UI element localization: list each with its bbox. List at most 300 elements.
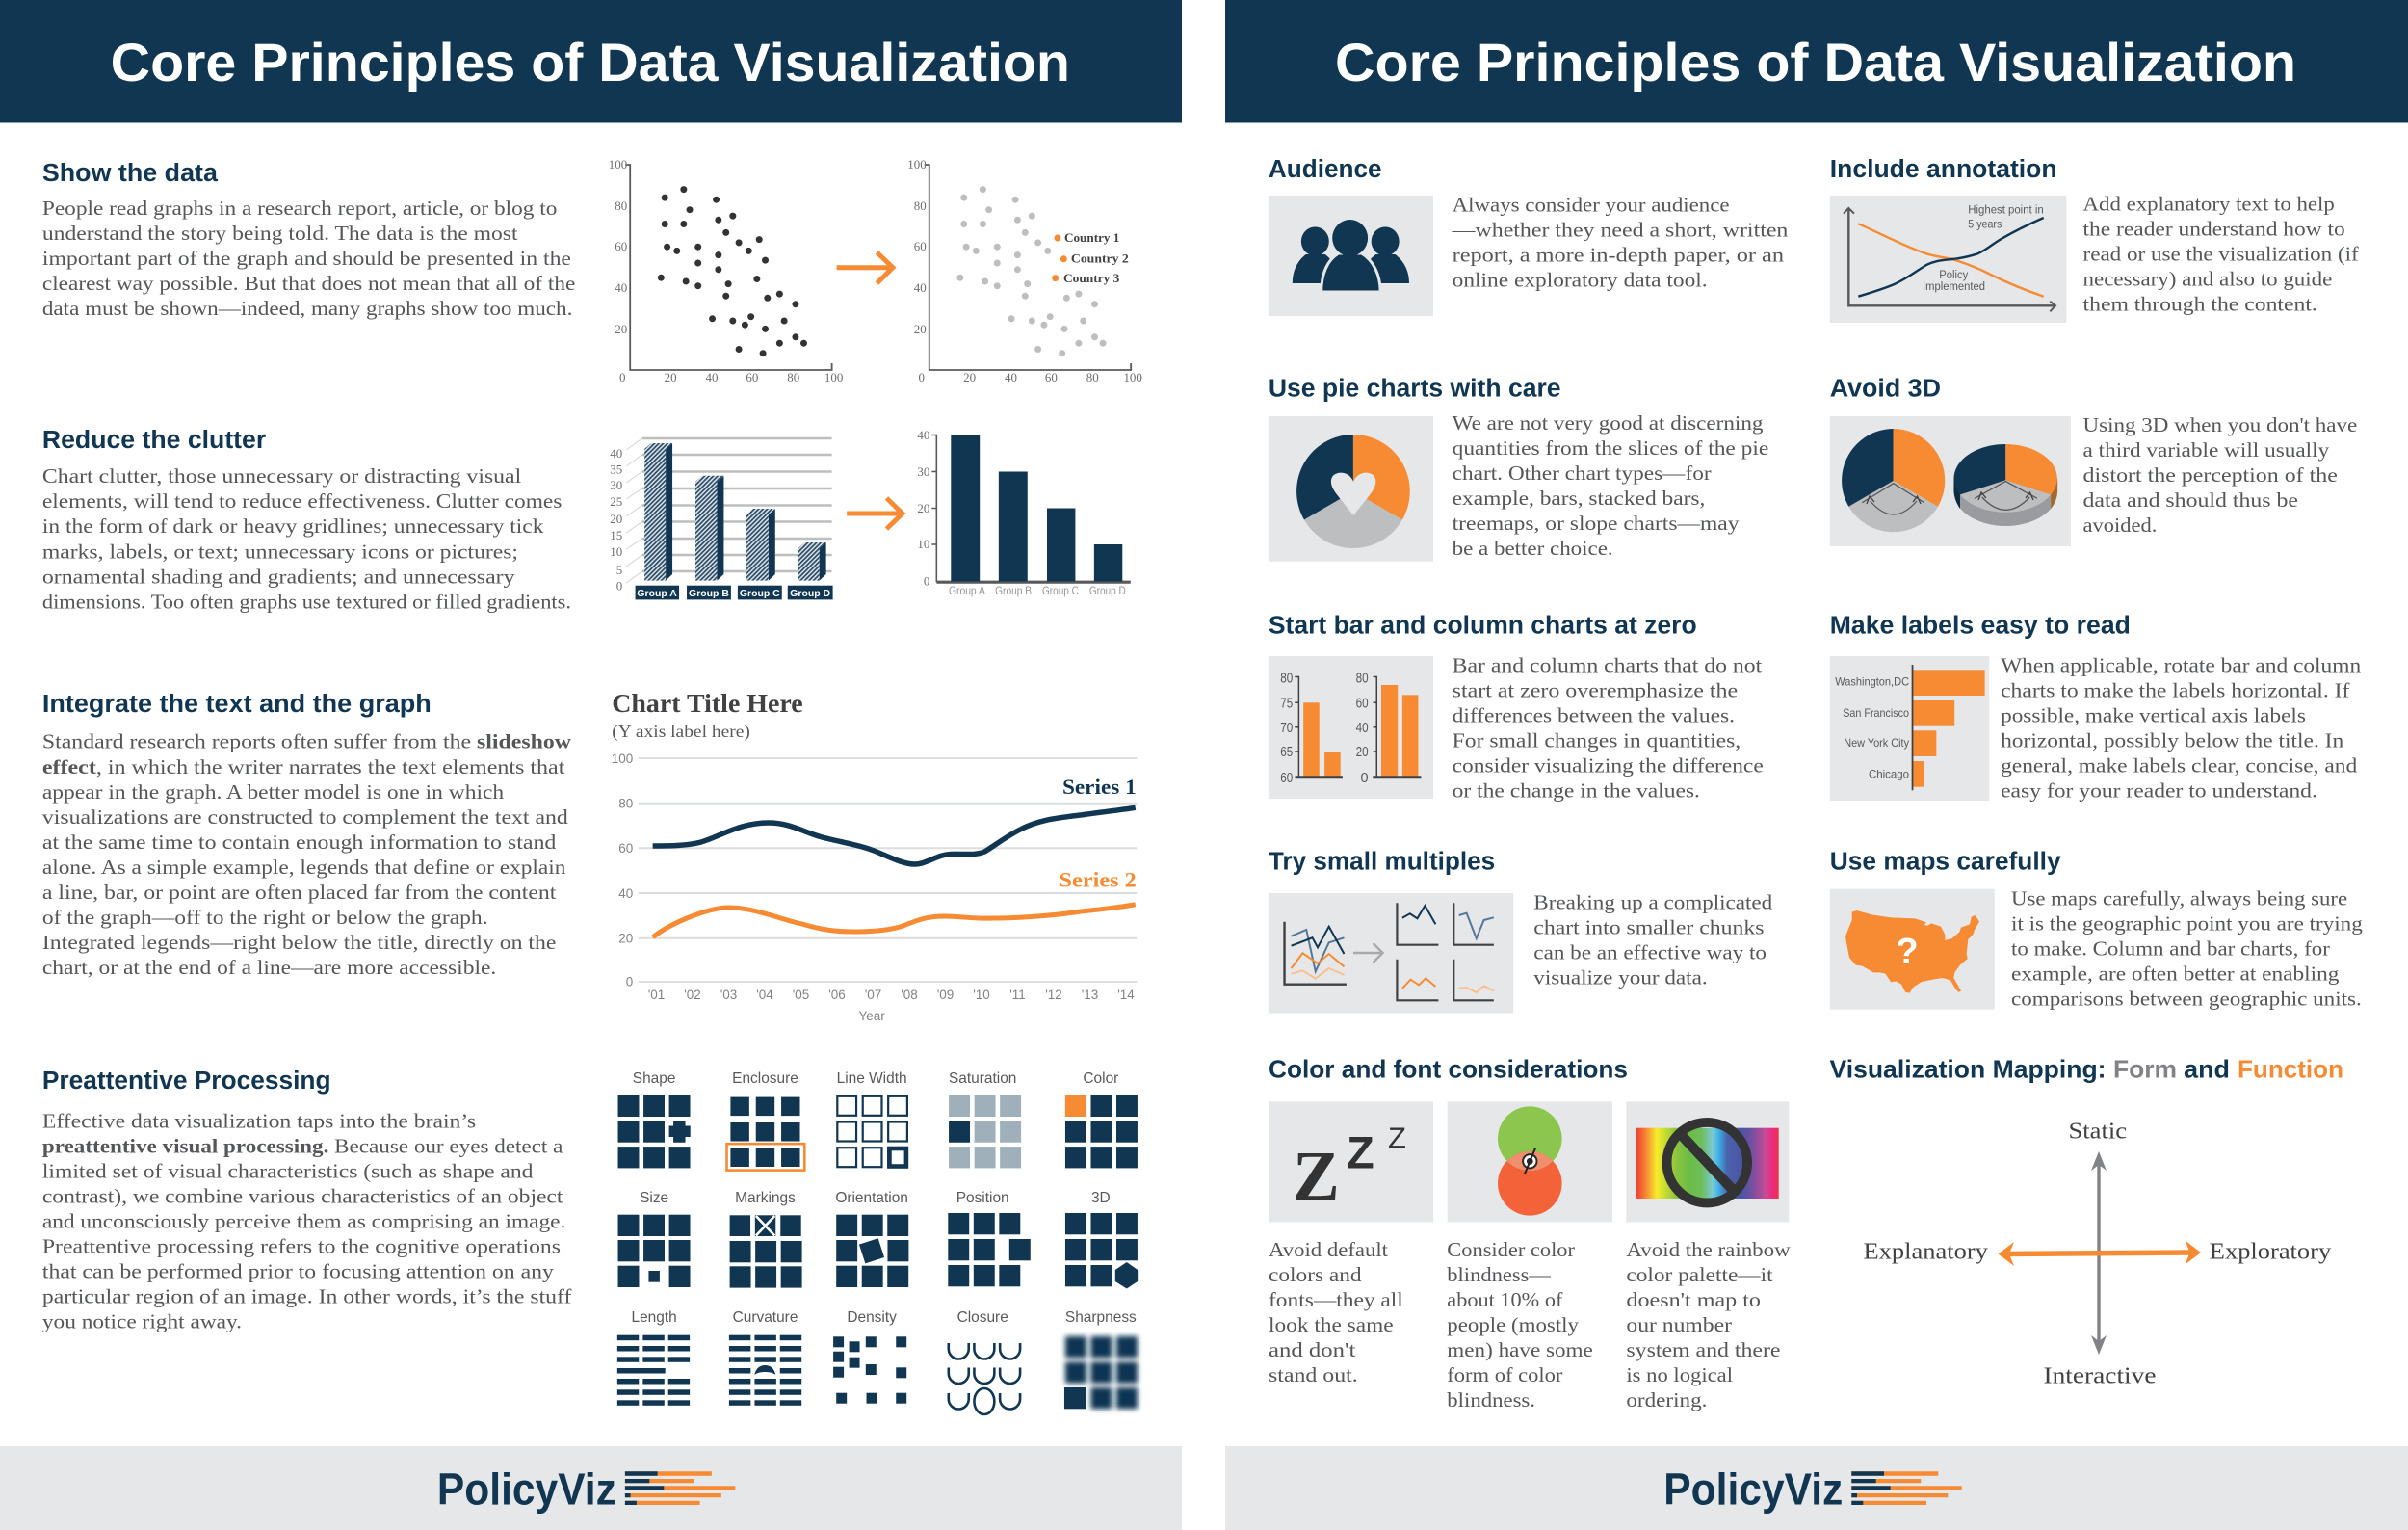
panel: Reduce the clutter <box>42 425 1131 614</box>
panel: Use pie charts with care <box>1269 374 1768 562</box>
panel: Color and font considerations <box>1269 1054 1791 1411</box>
text block <box>2083 192 2360 315</box>
text block: contrast), we combine various characteristics of an object <box>42 1185 563 1208</box>
text block: rainbow: is no logical <box>1626 1363 1733 1386</box>
y axis label: (Y axis label here) <box>612 722 750 742</box>
icon grid: 3D: 3D <box>1091 1190 1111 1206</box>
chart: line chart: '06 <box>828 988 846 1002</box>
text block: read or use the visualization (if <box>2083 242 2360 265</box>
text block: rainbow: color palette—it <box>1626 1263 1773 1286</box>
text block: to make. Column and bar charts, for <box>2011 936 2330 960</box>
icon grid: Markings <box>730 1190 802 1288</box>
panel: Include annotation <box>1830 154 2360 323</box>
heading: Show the data <box>42 158 218 187</box>
heading: Visualization Mapping: <box>1830 1054 2106 1083</box>
icon grid: Density: Density <box>847 1309 897 1326</box>
chart: cluttered 3D bars <box>610 438 833 599</box>
image box <box>1269 196 1433 316</box>
heading: Reduce the clutter <box>42 425 266 454</box>
chart: clean bars: 20 <box>917 501 929 515</box>
chart: annotated lines: Implemented <box>1923 281 1985 293</box>
image box <box>1830 656 1989 801</box>
heading: Make labels easy to read <box>1830 610 2131 640</box>
text block <box>2011 886 2363 1010</box>
chart: clean bars: Group B <box>995 586 1032 597</box>
chart: flat pie <box>1842 429 1945 532</box>
chart: line chart: '08 <box>901 988 918 1002</box>
series 2 label: Series 2 <box>1060 868 1137 892</box>
chart: line chart: '14 <box>1117 988 1135 1002</box>
arrow <box>847 498 903 529</box>
heading: Function <box>2238 1054 2343 1083</box>
icon grid: 3D <box>1065 1190 1138 1289</box>
image box <box>1830 196 2066 323</box>
text block: fonts: and don't <box>1269 1338 1355 1361</box>
chart: line chart: '03 <box>720 988 737 1002</box>
chart: clean bars: Group A <box>949 586 985 597</box>
chart: line chart: 60 <box>618 841 633 856</box>
text block: color blindness: form of color <box>1447 1363 1562 1386</box>
chart: zero axis bars: 80 <box>1356 671 1369 687</box>
chart: scatter plot before: 60 <box>615 239 627 253</box>
text block: quantities from the slices of the pie <box>1453 436 1768 460</box>
chart: clean bars: 10 <box>917 537 929 551</box>
text block: Add explanatory text to help <box>2083 192 2335 215</box>
icon grid: Curvature: Curvature <box>733 1309 798 1326</box>
series 1 label: Series 1 <box>1062 775 1137 799</box>
text block: it is the geographic point you are trying <box>2011 911 2363 935</box>
text block: them through the content. <box>2083 292 2317 315</box>
axis label: static: Static <box>2069 1119 2127 1144</box>
text block: treemaps, or slope charts—may <box>1453 512 1740 535</box>
chart: line chart: '10 <box>973 988 990 1002</box>
chart: cluttered 3D bars: Group D <box>790 589 831 599</box>
icon grid: Saturation <box>949 1070 1021 1168</box>
text block: fonts: fonts—they all <box>1269 1288 1403 1311</box>
chart: cluttered 3D bars: 40 <box>610 446 622 461</box>
icon grid: Length <box>617 1309 690 1406</box>
chart: cluttered 3D bars: Group C <box>740 589 780 599</box>
heading: Avoid 3D <box>1830 374 1941 403</box>
text block <box>42 464 571 614</box>
text block: consider visualizing the difference <box>1453 753 1764 777</box>
text block: charts to make the labels horizontal. If <box>2001 678 2350 701</box>
icon grid: Length: Length <box>631 1309 677 1326</box>
logo: left footer: PolicyViz <box>437 1464 616 1515</box>
chart: line chart: '13 <box>1082 988 1098 1002</box>
axis label: exploratory: Exploratory <box>2210 1240 2331 1265</box>
panel: Start bar and column charts at zero <box>1269 610 1764 802</box>
chart: horizontal bars with labels: Chicago <box>1869 769 1909 780</box>
icon grid: Line Width <box>837 1070 907 1167</box>
text block: appear in the graph. A better model is one in which <box>42 780 504 804</box>
icon grid: Size <box>618 1190 691 1287</box>
text block: horizontal, possibly below the title. In <box>2001 728 2343 752</box>
icon grid: Orientation: Orientation <box>835 1190 908 1206</box>
icon grid: Color <box>1065 1070 1138 1168</box>
text block: and unconsciously perceive them as comprising an image. <box>42 1210 565 1233</box>
chart: small multiple light orange <box>1453 960 1494 1000</box>
text block: clearest way possible. But that does not mean that all of the <box>42 272 575 295</box>
chart: annotated lines: Highest point in <box>1968 205 2044 217</box>
text block: chart into smaller chunks <box>1533 915 1764 938</box>
chart: annotated lines: 5 years <box>1968 220 2002 231</box>
chart: small multiple blue <box>1453 903 1494 945</box>
text block: general, make labels clear, concise, and <box>2001 753 2358 777</box>
text block: online exploratory data tool. <box>1453 268 1708 291</box>
panel: Avoid 3D <box>1830 374 2357 546</box>
text block: Effective data visualization taps into the brain’s <box>42 1110 476 1133</box>
panel: Visualization Mapping <box>1830 1054 2343 1388</box>
left page background bands <box>0 0 1182 1530</box>
text block <box>42 1110 572 1333</box>
text block: color blindness: about 10% of <box>1447 1288 1563 1311</box>
chart: horizontal bars with labels <box>1835 665 1985 790</box>
icon: Zzz letters <box>1293 1121 1406 1215</box>
text block <box>42 730 572 979</box>
chart: scatter plot before: 40 <box>705 370 718 384</box>
chart: horizontal bars with labels: San Francisco <box>1843 708 1909 720</box>
text block: can be an effective way to <box>1533 940 1767 963</box>
text block <box>1453 411 1768 560</box>
text block: fonts <box>1269 1238 1403 1386</box>
icon grid: Sharpness: Sharpness <box>1065 1309 1137 1326</box>
text block <box>1452 193 1789 291</box>
logo: right footer <box>1663 1464 1962 1515</box>
panel: Use maps carefully <box>1830 847 2363 1010</box>
chart: scatter plot after: 80 <box>914 198 927 213</box>
icon grid: Closure: Closure <box>957 1309 1008 1326</box>
chart: scatter plot before: 20 <box>615 322 627 336</box>
text block: rainbow: Avoid the rainbow <box>1626 1238 1791 1261</box>
text block: understand the story being told. The data is the most <box>42 222 518 245</box>
chart: line chart <box>612 689 1137 1023</box>
text block: report, a more in-depth paper, or an <box>1453 243 1784 266</box>
chart: cluttered 3D bars: 30 <box>610 478 622 492</box>
icon grid: Density <box>833 1309 906 1404</box>
chart: cluttered 3D bars: 15 <box>610 528 622 542</box>
chart: line chart: '02 <box>684 988 701 1002</box>
icon grid: Saturation: Saturation <box>949 1070 1016 1087</box>
text block: Standard research reports often suffer from the slideshow <box>42 730 572 753</box>
icon: prohibited rainbow <box>1636 1122 1779 1202</box>
text block: data must be shown—indeed, many graphs show too much. <box>42 297 572 320</box>
text block: Integrated legends—right below the title, directly on the <box>42 931 556 954</box>
chart: cluttered 3D bars: 0 <box>616 578 622 594</box>
text block: at the same time to contain enough information to stand <box>42 831 557 854</box>
text block: color blindness: people (mostly <box>1447 1313 1579 1336</box>
chart: scatter plot after: 20 <box>914 322 927 336</box>
text block: avoided. <box>2083 514 2157 537</box>
icon: Zzz letters: Z <box>1347 1126 1374 1177</box>
chart: annotated lines: Policy <box>1939 270 1969 281</box>
icon grid: Enclosure <box>727 1070 804 1171</box>
chart: scatter plot after: Country 1 <box>1064 230 1119 245</box>
text block: marks, labels, or text; unnecessary icons or pictures; <box>42 540 518 564</box>
heading: Integrate the text and the graph <box>42 689 432 718</box>
chart: small multiple navy <box>1397 903 1438 945</box>
panel: Make labels easy to read <box>1830 610 2361 802</box>
logo: left footer <box>437 1464 735 1515</box>
heading: Form <box>2113 1054 2177 1083</box>
image box <box>1269 893 1513 1014</box>
heading: Start bar and column charts at zero <box>1269 610 1697 640</box>
chart: line chart: Year <box>859 1009 885 1023</box>
chart: truncated axis bars: 80 <box>1280 671 1293 687</box>
chart: line chart: '11 <box>1009 988 1026 1002</box>
text block: fonts: colors and <box>1269 1263 1362 1286</box>
text block: important part of the graph and should be presented in the <box>42 247 571 270</box>
text block: effect , in which the writer narrates the text elements that <box>42 755 564 778</box>
panel: Audience <box>1269 154 1789 316</box>
text block: rainbow: our number <box>1626 1313 1732 1336</box>
text block: chart, or at the end of a line—are more accessible. <box>42 956 496 979</box>
chart: scatter plot after: 0 <box>919 370 925 384</box>
text block: When applicable, rotate bar and column <box>2001 653 2361 676</box>
text block: ornamental shading and gradients; and unnecessary <box>42 565 515 589</box>
chart: truncated axis bars: 65 <box>1280 745 1293 760</box>
icon grid: Shape: Shape <box>633 1070 675 1087</box>
icon grid: Shape <box>618 1070 691 1168</box>
chart: scatter plot before: 100 <box>824 370 843 384</box>
title: right page: Core Principles of Data Visualization <box>1335 32 2296 92</box>
chart: zero axis bars: 60 <box>1356 696 1369 712</box>
chart: combined lines <box>1285 922 1347 985</box>
text block: alone. As a simple example, legends that define or explain <box>42 856 566 879</box>
chart: line chart: 0 <box>626 974 633 989</box>
text block: color blindness: blindness— <box>1447 1263 1551 1286</box>
text block: dimensions. Too often graphs use textured or filled gradients. <box>42 590 571 614</box>
icon grid: Orientation <box>835 1190 908 1287</box>
panel: Show the data <box>42 157 1142 384</box>
chart: scatter plot after: 80 <box>1086 370 1099 384</box>
text block: fonts: stand out. <box>1269 1363 1358 1386</box>
text block: particular region of an image. In other words, it’s the stuff <box>42 1285 572 1308</box>
text block: Use maps carefully, always being sure <box>2011 886 2347 910</box>
text block: limited set of visual characteristics (such as shape and <box>42 1160 534 1183</box>
heading: Audience <box>1269 154 1382 183</box>
chart: scatter plot before: 40 <box>615 280 627 295</box>
chart: line chart: '07 <box>865 988 881 1002</box>
text block: color blindness: blindness. <box>1447 1388 1535 1411</box>
panel: Try small multiples <box>1269 847 1773 1014</box>
icon: audience people <box>1293 220 1409 292</box>
text block: you notice right away. <box>42 1310 242 1333</box>
text block: color blindness: men) have some <box>1447 1338 1593 1361</box>
chart title: Chart Title Here <box>612 689 803 718</box>
text block: —whether they need a short, written <box>1452 218 1789 241</box>
chart: line chart: '05 <box>793 988 809 1002</box>
heading: Preattentive Processing <box>42 1066 331 1095</box>
text block: rainbow: doesn't map to <box>1626 1288 1761 1311</box>
chart: truncated axis bars: 60 <box>1280 771 1293 786</box>
text block: that can be performed prior to focusing attention on any <box>42 1260 554 1283</box>
text block: example, bars, stacked bars, <box>1453 487 1705 510</box>
chart: scatter plot before: 60 <box>746 370 758 384</box>
text block: of the graph—off to the right or below the graph. <box>42 906 488 929</box>
icon grid: Markings: Markings <box>735 1190 796 1206</box>
text block <box>2001 653 2361 802</box>
text block: rainbow: ordering. <box>1626 1388 1707 1411</box>
text block: fonts: Avoid default <box>1269 1238 1388 1261</box>
text block: differences between the values. <box>1453 703 1735 726</box>
chart: clean bars: Group C <box>1042 586 1079 597</box>
chart: scatter plot after <box>907 157 1142 384</box>
text block: in the form of dark or heavy gridlines; unnecessary tick <box>42 514 544 538</box>
text block: rainbow <box>1626 1238 1791 1411</box>
map: United States: ? <box>1896 932 1919 972</box>
text block: comparisons between geographic units. <box>2011 987 2362 1010</box>
text block: possible, make vertical axis labels <box>2001 703 2306 726</box>
image box: rainbow <box>1626 1101 1789 1222</box>
text block: elements, will tend to reduce effectiveness. Clutter comes <box>42 489 562 513</box>
chart: cluttered 3D bars: 10 <box>610 544 622 559</box>
chart: line chart: '01 <box>648 988 665 1002</box>
text block: easy for your reader to understand. <box>2001 778 2317 802</box>
text block: be a better choice. <box>1453 537 1613 560</box>
text block: chart. Other chart types—for <box>1453 462 1712 485</box>
image box: color blindness <box>1448 1101 1612 1222</box>
heading: Use pie charts with care <box>1269 374 1561 403</box>
chart: small multiple orange <box>1397 960 1438 1000</box>
text block: Using 3D when you don't have <box>2083 413 2357 436</box>
text block: color blindness: Consider color <box>1447 1238 1575 1261</box>
image box <box>1269 416 1433 562</box>
text block <box>1453 653 1764 802</box>
icon grid: Line Width: Line Width <box>837 1070 907 1087</box>
chart: clean bars: 30 <box>917 464 929 479</box>
icon grid: Color: Color <box>1083 1070 1118 1087</box>
chart: scatter plot before: 80 <box>787 370 799 384</box>
chart: scatter plot before: 20 <box>665 370 677 384</box>
chart: line chart: '12 <box>1045 988 1062 1002</box>
image box <box>1269 656 1433 799</box>
chart: pie with heart <box>1296 435 1410 548</box>
chart: zero axis bars: 0 <box>1361 771 1369 786</box>
heading: Try small multiples <box>1269 847 1495 876</box>
chart: line chart: 100 <box>612 752 633 766</box>
chart: line chart: 20 <box>618 931 633 946</box>
text block: a line, bar, or point are often placed far from the content <box>42 881 556 904</box>
text block <box>2083 413 2357 537</box>
image box <box>1830 889 1995 1010</box>
chart: scatter plot after: 20 <box>963 370 976 384</box>
chart: scatter plot before: 100 <box>609 157 627 171</box>
text block: We are not very good at discerning <box>1453 411 1764 435</box>
chart: zero axis bars: 40 <box>1356 721 1369 736</box>
chart: scatter plot before <box>609 157 843 384</box>
icon grid: Curvature <box>729 1309 801 1406</box>
chart: cluttered 3D bars: 20 <box>610 512 622 526</box>
chart: cluttered 3D bars: Group A <box>637 589 677 599</box>
chart: zero axis bars: 20 <box>1356 745 1369 760</box>
panel: Preattentive Processing <box>42 1066 1138 1414</box>
series 1 line <box>653 807 1136 864</box>
chart: zero axis bars <box>1356 671 1421 786</box>
text block: Chart clutter, those unnecessary or distracting visual <box>42 464 521 488</box>
chart: clean bars: Group D <box>1089 586 1126 597</box>
icon grid: Size: Size <box>640 1190 668 1206</box>
text block: necessary) and also to guide <box>2083 267 2332 290</box>
arrow: vertical form axis <box>2091 1151 2107 1355</box>
heading: Use maps carefully <box>1830 847 2061 876</box>
chart: scatter plot after: 100 <box>1123 370 1142 384</box>
text block: For small changes in quantities, <box>1453 728 1741 752</box>
text block: People read graphs in a research report, article, or blog to <box>42 197 557 220</box>
chart: scatter plot after: 40 <box>1005 370 1017 384</box>
text block: preattentive visual processing. Because our eyes detect a <box>42 1135 563 1158</box>
map: United States <box>1845 910 1979 993</box>
icon grid: Position: Position <box>956 1190 1009 1206</box>
icon: Zzz letters: Z <box>1388 1121 1406 1155</box>
chart: truncated axis bars: 75 <box>1280 696 1293 712</box>
chart: line chart: 80 <box>618 796 633 811</box>
text block: data and should thus be <box>2083 488 2298 512</box>
chart: line chart: '09 <box>937 988 954 1002</box>
text block: Breaking up a complicated <box>1533 890 1773 913</box>
logo: right footer: PolicyViz <box>1663 1464 1843 1515</box>
chart: cluttered 3D bars: 35 <box>610 462 622 477</box>
chart: scatter plot after: Country 3 <box>1063 271 1120 285</box>
chart: scatter plot after: 60 <box>914 239 927 253</box>
text block: fonts: look the same <box>1269 1313 1394 1336</box>
chart: scatter plot after: 60 <box>1045 370 1058 384</box>
axis label: interactive: Interactive <box>2044 1363 2156 1388</box>
icon grid: Enclosure: Enclosure <box>732 1070 798 1087</box>
text block: visualizations are constructed to complement the text and <box>42 805 568 829</box>
title: left page: Core Principles of Data Visualization <box>111 32 1070 92</box>
icon grid: Closure <box>949 1309 1020 1414</box>
chart: line chart: '04 <box>756 988 773 1002</box>
heading: Color and font considerations <box>1269 1054 1628 1083</box>
chart: cluttered 3D bars: 5 <box>616 563 622 577</box>
arrow <box>1353 943 1383 963</box>
icon grid: Sharpness <box>1064 1309 1138 1409</box>
chart: cluttered 3D bars: Group B <box>689 589 729 599</box>
text block <box>42 197 575 320</box>
text block: color blindness <box>1447 1238 1593 1411</box>
heading: Include annotation <box>1830 154 2057 183</box>
text block: Preattentive processing refers to the cognitive operations <box>42 1235 561 1258</box>
chart: line chart: 40 <box>618 886 633 901</box>
text block: Bar and column charts that do not <box>1453 653 1762 676</box>
text block: the reader understand how to <box>2083 217 2345 240</box>
heading: and <box>2184 1054 2230 1083</box>
chart: clean bars: 40 <box>917 428 929 442</box>
text block: rainbow: system and there <box>1626 1338 1780 1361</box>
chart: scatter plot after: Country 2 <box>1071 251 1129 266</box>
chart: horizontal bars with labels: New York City <box>1844 738 1909 750</box>
arrow <box>837 252 893 283</box>
chart: clean bars: 0 <box>924 573 929 589</box>
chart: scatter plot before: 0 <box>619 370 625 384</box>
image box: fonts <box>1269 1101 1433 1222</box>
panel: Integrate the text and the graph <box>42 689 1137 1023</box>
chart: scatter plot before: 80 <box>615 198 627 213</box>
axis label: explanatory: Explanatory <box>1863 1240 1988 1265</box>
chart: clean bars <box>917 428 1131 597</box>
text block: or the change in the values. <box>1453 778 1700 802</box>
text block: start at zero overemphasize the <box>1453 678 1738 701</box>
chart: annotated lines <box>1844 205 2055 311</box>
text block: distort the perception of the <box>2083 463 2338 487</box>
chart: truncated axis bars <box>1280 671 1343 786</box>
series 2 line <box>653 905 1136 937</box>
icon: Zzz letters: Z <box>1293 1137 1340 1215</box>
chart: 3D pie <box>1954 444 2057 526</box>
heading <box>1830 1054 2343 1083</box>
text block: Always consider your audience <box>1453 193 1730 216</box>
